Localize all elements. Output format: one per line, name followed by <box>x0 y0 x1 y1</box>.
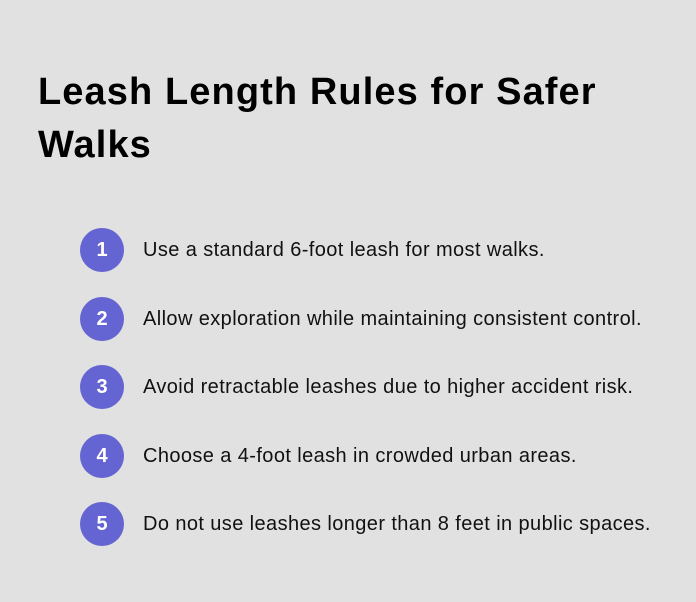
title: Leash Length Rules for Safer <box>38 71 597 113</box>
item 1: Use a standard 6-foot leash for most walks. <box>143 239 545 261</box>
item 3 <box>80 365 633 409</box>
item 5: 5 <box>96 513 108 535</box>
item 1 <box>80 228 545 272</box>
title: Walks <box>38 124 152 166</box>
item 3: Avoid retractable leashes due to higher accident risk. <box>143 376 633 398</box>
item 4: Choose a 4-foot leash in crowded urban areas. <box>143 445 577 467</box>
item 2: 2 <box>96 308 108 330</box>
item 4 <box>80 434 577 478</box>
item 4: 4 <box>96 445 108 467</box>
item 2: Allow exploration while maintaining consistent control. <box>143 308 642 330</box>
item 5: Do not use leashes longer than 8 feet in public spaces. <box>143 513 651 535</box>
title <box>38 71 597 166</box>
item 1: 1 <box>96 239 108 261</box>
item 2 <box>80 297 642 341</box>
item 3: 3 <box>96 376 108 398</box>
item 5 <box>80 502 651 546</box>
